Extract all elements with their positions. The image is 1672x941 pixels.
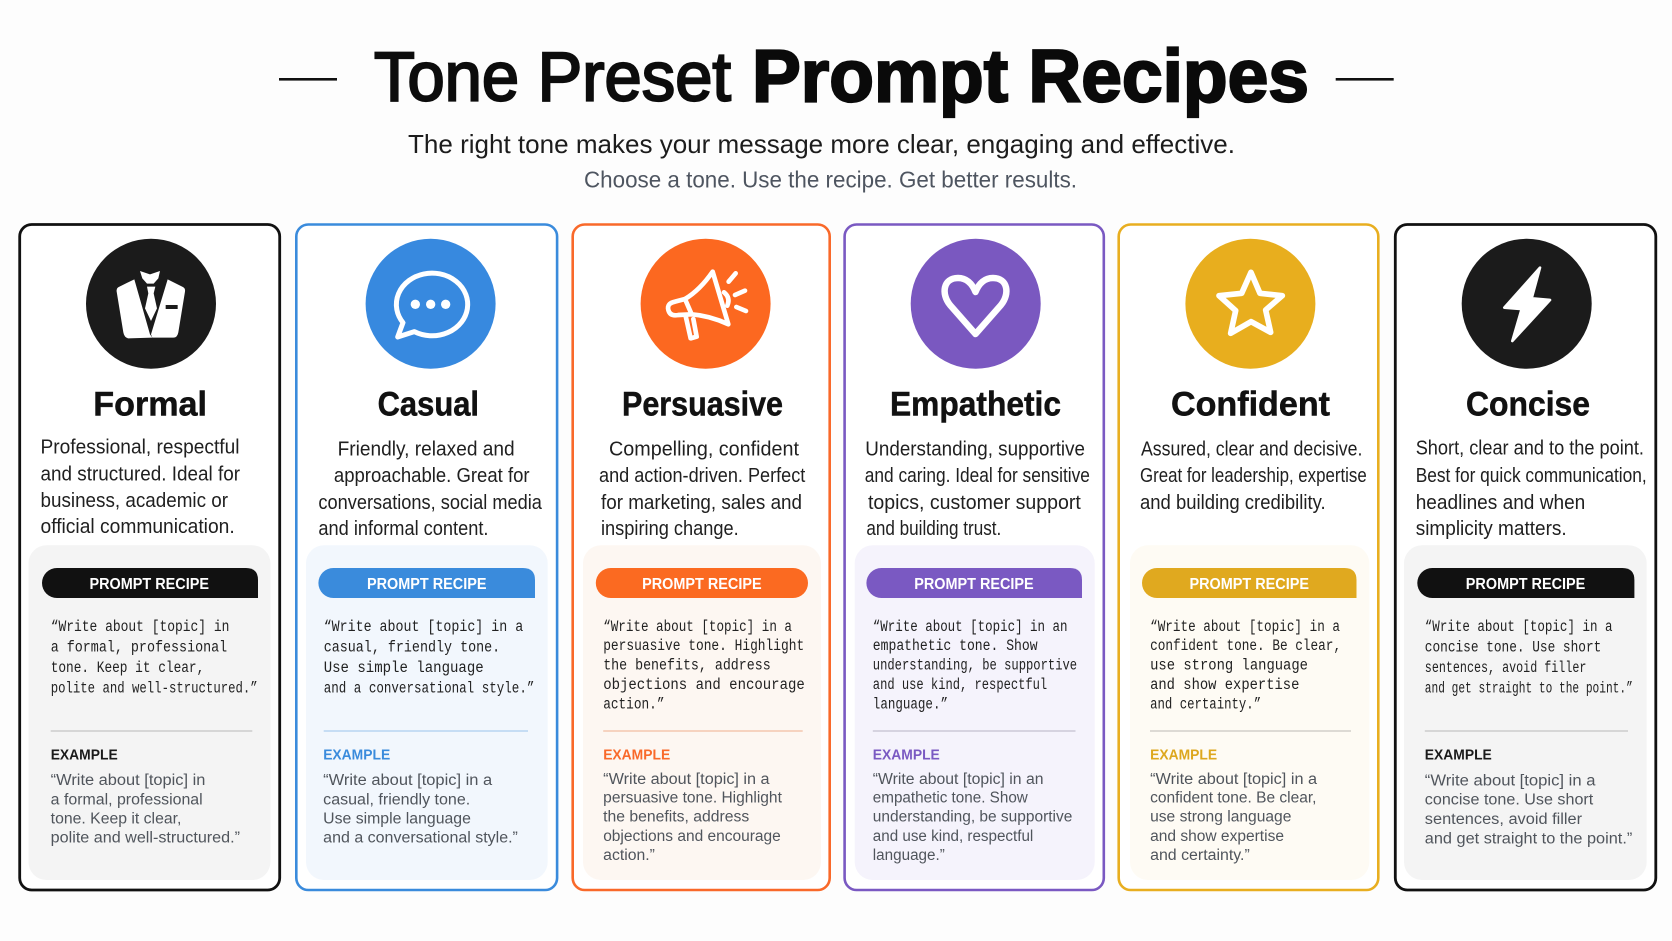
- recipe text: language.”: [873, 696, 948, 714]
- description: conversations, social media: [318, 492, 543, 514]
- recipe text: “Write about [topic] in: [51, 618, 229, 636]
- recipe text: tone. Keep it clear,: [51, 659, 204, 677]
- example text: [1425, 772, 1632, 847]
- description: and caring. Ideal for sensitive: [865, 465, 1090, 487]
- recipe text: [324, 618, 534, 698]
- description: [1416, 438, 1647, 540]
- description: topics, customer support: [868, 492, 1081, 514]
- example text: and show expertise: [1150, 828, 1284, 845]
- description: for marketing, sales and: [601, 492, 802, 514]
- panel: Formal: [20, 224, 280, 890]
- recipe text: “Write about [topic] in a: [603, 618, 792, 636]
- recipe text: “Write about [topic] in a: [1150, 618, 1340, 636]
- recipe text: [1150, 618, 1341, 714]
- example text: and a conversational style.”: [323, 830, 518, 847]
- recipe text: and show expertise: [1150, 676, 1299, 694]
- description: Assured, clear and decisive.: [1141, 438, 1362, 460]
- description: Short, clear and to the point.: [1416, 438, 1644, 460]
- recipe panel: [1404, 545, 1647, 880]
- example text: Use simple language: [323, 810, 471, 827]
- recipe panel: [855, 545, 1095, 880]
- recipe text: and a conversational style.”: [324, 680, 534, 698]
- recipe text: use strong language: [1150, 656, 1308, 674]
- example text: “Write about [topic] in an: [873, 771, 1044, 788]
- description: and structured. Ideal for: [40, 463, 240, 485]
- example text: “Write about [topic] in a: [1425, 772, 1596, 789]
- example text: [1150, 771, 1317, 864]
- recipe text: and use kind, respectful: [873, 676, 1047, 694]
- panel: Persuasive: [573, 224, 830, 890]
- title: [279, 34, 1394, 118]
- example text: tone. Keep it clear,: [51, 810, 181, 827]
- example label: EXAMPLE: [873, 746, 940, 763]
- description: simplicity matters.: [1416, 518, 1567, 540]
- pill: prompt recipe: [1417, 568, 1634, 598]
- example text: persuasive tone. Highlight: [603, 790, 783, 807]
- description: [318, 438, 543, 540]
- pill: prompt recipe: PROMPT RECIPE: [90, 576, 209, 593]
- description: Professional, respectful: [40, 437, 240, 459]
- heading: Formal: [93, 386, 207, 424]
- pill: prompt recipe: [866, 568, 1082, 598]
- recipe text: persuasive tone. Highlight: [603, 637, 804, 655]
- example text: “Write about [topic] in a: [1150, 771, 1317, 788]
- icon: star: [1185, 239, 1315, 369]
- recipe text: and certainty.”: [1150, 696, 1261, 714]
- example label: EXAMPLE: [1150, 746, 1217, 763]
- icon: megaphone: [641, 239, 771, 369]
- panel: Confident: [1119, 224, 1378, 890]
- example text: understanding, be supportive: [873, 809, 1072, 826]
- example label: EXAMPLE: [323, 746, 390, 763]
- pill: prompt recipe: [318, 568, 535, 598]
- description: approachable. Great for: [334, 465, 530, 487]
- recipe text: the benefits, address: [603, 656, 771, 674]
- heading: Confident: [1171, 386, 1330, 424]
- panel: Casual: [296, 224, 557, 890]
- description: [40, 437, 240, 538]
- description: Understanding, supportive: [865, 438, 1085, 460]
- recipe panel: [583, 545, 821, 880]
- example text: “Write about [topic] in a: [323, 772, 493, 789]
- example text: sentences, avoid filler: [1425, 811, 1582, 828]
- example text: “Write about [topic] in a: [603, 771, 770, 788]
- icon: tuxedo: [86, 239, 216, 369]
- example label: EXAMPLE: [51, 746, 118, 763]
- recipe text: [873, 618, 1077, 714]
- heading: Persuasive: [622, 386, 783, 424]
- recipe panel: [1130, 545, 1369, 880]
- recipe text: confident tone. Be clear,: [1150, 637, 1341, 655]
- description: inspiring change.: [601, 518, 739, 540]
- recipe text: “Write about [topic] in a: [1425, 618, 1612, 636]
- recipe text: a formal, professional: [51, 639, 227, 657]
- heading: Casual: [378, 386, 479, 424]
- recipe text: [603, 618, 805, 714]
- example text: empathetic tone. Show: [873, 790, 1029, 807]
- title: Prompt Recipes: [752, 34, 1309, 118]
- recipe text: Use simple language: [324, 659, 484, 677]
- example text: and get straight to the point.”: [1425, 830, 1632, 847]
- recipe text: polite and well-structured.”: [51, 680, 258, 698]
- example text: language.”: [873, 847, 945, 864]
- panel: Concise: [1395, 224, 1656, 890]
- example text: objections and encourage: [603, 828, 781, 845]
- example text: a formal, professional: [51, 791, 203, 808]
- example label: EXAMPLE: [603, 746, 670, 763]
- recipe text: casual, friendly tone.: [324, 639, 500, 657]
- description: [1140, 438, 1367, 514]
- recipe text: “Write about [topic] in a: [324, 618, 523, 636]
- heading: Concise: [1466, 386, 1590, 424]
- recipe text: empathetic tone. Show: [873, 637, 1038, 655]
- pill: prompt recipe: PROMPT RECIPE: [367, 576, 486, 593]
- pill: prompt recipe: PROMPT RECIPE: [642, 576, 762, 593]
- pill: prompt recipe: PROMPT RECIPE: [1466, 576, 1585, 593]
- example text: concise tone. Use short: [1425, 792, 1594, 809]
- pill: prompt recipe: PROMPT RECIPE: [914, 576, 1034, 593]
- example text: and certainty.”: [1150, 847, 1250, 864]
- example text: [51, 772, 240, 847]
- recipe panel: [306, 545, 548, 880]
- tagline: Choose a tone. Use the recipe. Get better results.: [584, 166, 1077, 192]
- recipe panel: [28, 545, 270, 880]
- pill: prompt recipe: [596, 568, 808, 598]
- example text: casual, friendly tone.: [323, 791, 470, 808]
- pill: prompt recipe: PROMPT RECIPE: [1190, 576, 1309, 593]
- icon: chat bubble: [366, 239, 496, 369]
- recipe text: [1425, 618, 1633, 698]
- example text: use strong language: [1150, 809, 1291, 826]
- recipe text: [51, 618, 258, 698]
- description: Friendly, relaxed and: [338, 438, 515, 460]
- description: Compelling, confident: [609, 438, 799, 460]
- title: Tone Preset: [374, 38, 731, 116]
- example text: “Write about [topic] in: [51, 772, 205, 789]
- example text: [323, 772, 518, 847]
- example text: polite and well-structured.”: [51, 830, 240, 847]
- description: Great for leadership, expertise: [1140, 465, 1367, 487]
- recipe text: “Write about [topic] in an: [873, 618, 1068, 636]
- description: and informal content.: [318, 518, 488, 540]
- icon: lightning bolt: [1462, 239, 1592, 369]
- description: headlines and when: [1416, 492, 1585, 514]
- example text: action.”: [603, 847, 655, 864]
- example text: the benefits, address: [603, 809, 749, 826]
- subtitle: The right tone makes your message more clear, engaging and effective.: [408, 129, 1235, 159]
- description: [599, 438, 806, 540]
- panel: Empathetic: [845, 224, 1104, 890]
- heading: Empathetic: [890, 386, 1061, 424]
- recipe text: understanding, be supportive: [873, 656, 1077, 674]
- description: business, academic or: [40, 490, 228, 512]
- pill: prompt recipe: [1142, 568, 1356, 598]
- description: and building credibility.: [1140, 492, 1326, 514]
- example text: [603, 771, 783, 864]
- description: and action-driven. Perfect: [599, 465, 806, 487]
- example text: [873, 771, 1072, 864]
- description: and building trust.: [866, 518, 1001, 540]
- recipe text: objections and encourage: [603, 676, 805, 694]
- recipe text: concise tone. Use short: [1425, 639, 1601, 657]
- example label: EXAMPLE: [1425, 746, 1492, 763]
- recipe text: action.”: [603, 696, 664, 714]
- icon: heart: [911, 239, 1041, 369]
- description: [865, 438, 1090, 540]
- example text: confident tone. Be clear,: [1150, 790, 1316, 807]
- pill: prompt recipe: [42, 568, 258, 598]
- recipe text: sentences, avoid filler: [1425, 659, 1586, 677]
- description: official communication.: [40, 516, 235, 538]
- example text: and use kind, respectful: [873, 828, 1033, 845]
